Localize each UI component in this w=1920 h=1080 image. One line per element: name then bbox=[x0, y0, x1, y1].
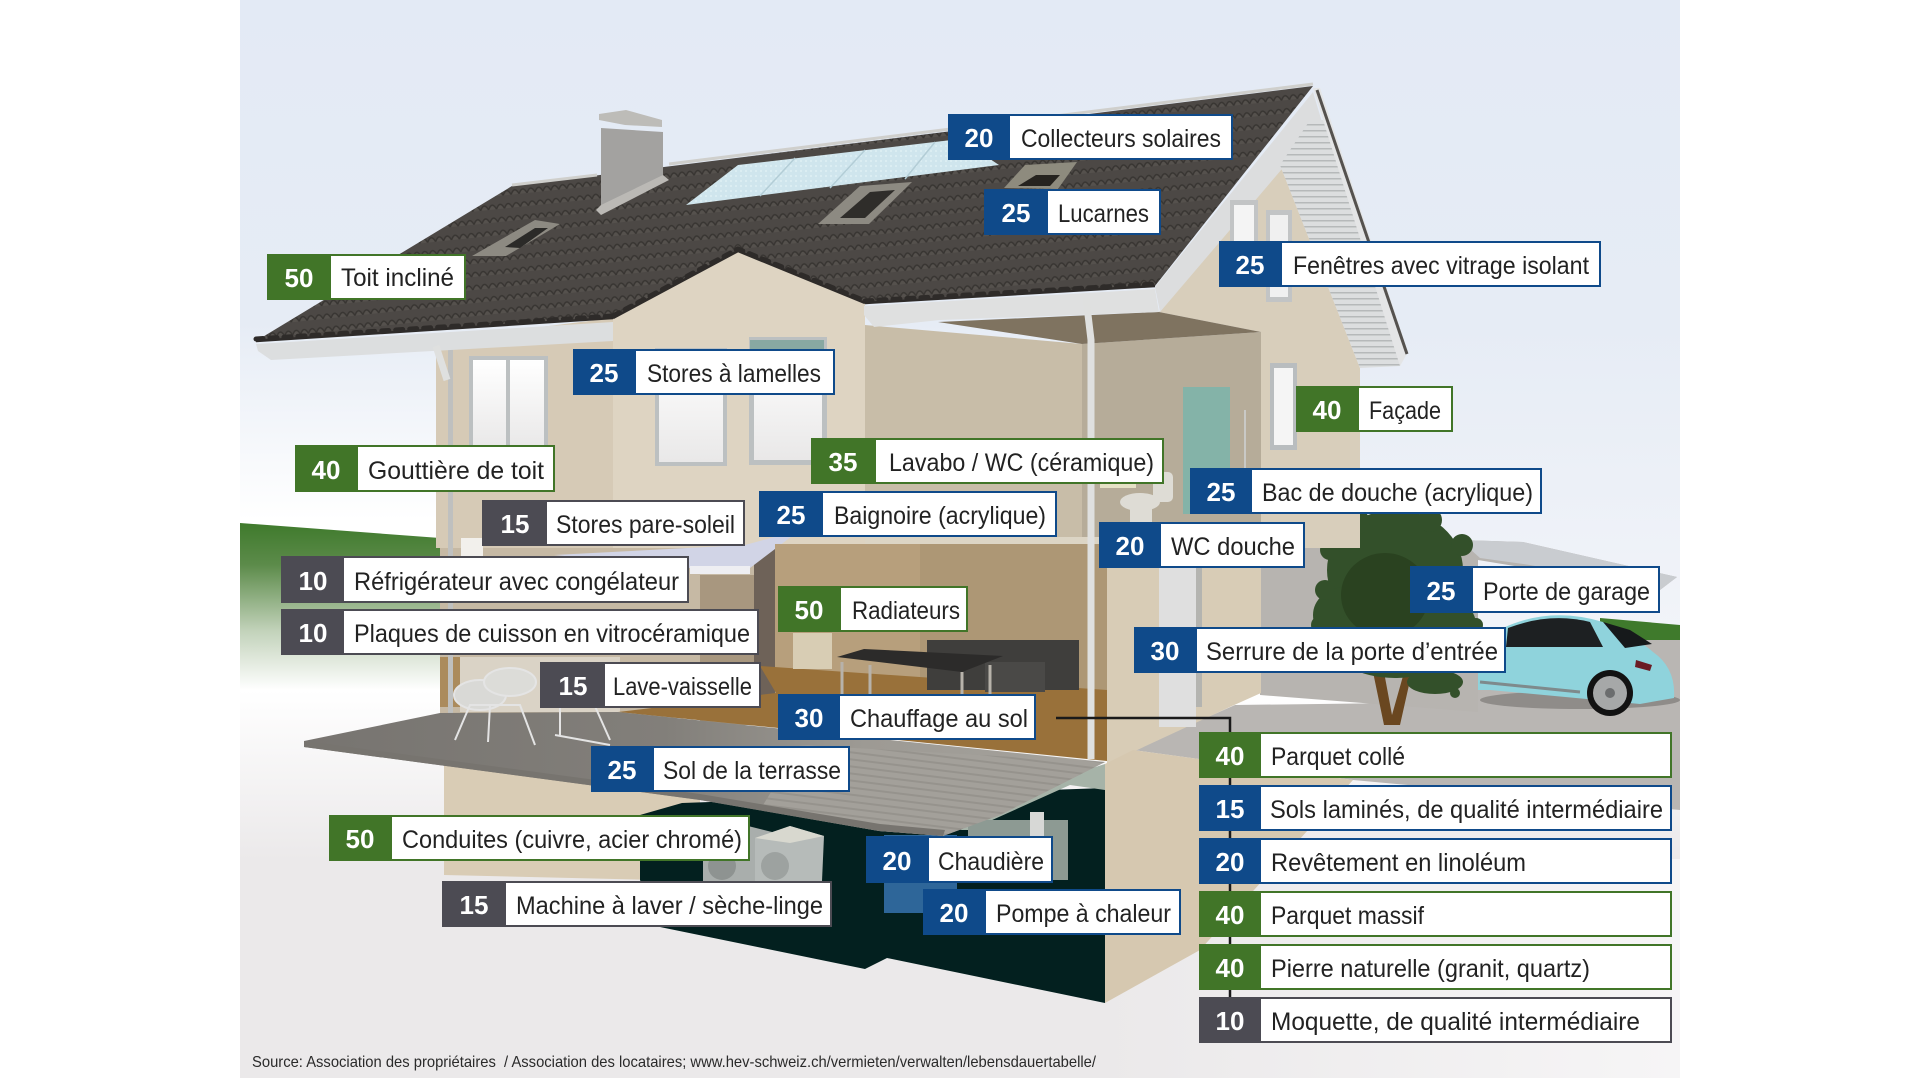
label: Lave-vaisselle bbox=[540, 662, 761, 708]
item: Sols laminés bbox=[1199, 785, 1672, 831]
label: Réfrigérateur avec congélateur bbox=[281, 556, 689, 603]
label: Serrure de la porte d'entrée: 30 bbox=[1151, 636, 1179, 666]
garage and driveway bbox=[1133, 540, 1680, 810]
item: Parquet massif bbox=[1199, 891, 1672, 937]
label: Plaques de cuisson en vitrocéramique bbox=[281, 609, 759, 655]
sofa bbox=[927, 640, 1079, 692]
item: Sols laminés: 15 bbox=[1216, 794, 1244, 824]
barge boards and soffit bbox=[1155, 92, 1322, 312]
label: Chauffage au sol: 30 bbox=[795, 703, 823, 733]
label: Conduites (cuivre, acier chromé): Conduites (cuivre, acier chromé) bbox=[402, 826, 742, 854]
label: Chaudière: 20 bbox=[883, 846, 911, 876]
label: Pompe à chaleur: 20 bbox=[940, 898, 968, 928]
label: Fenêtres avec vitrage isolant: Fenêtres avec vitrage isolant bbox=[1293, 252, 1589, 280]
label: WC douche: 20 bbox=[1116, 531, 1144, 561]
item: Parquet collé bbox=[1199, 732, 1672, 778]
item: Sols laminés: Sols laminés, de qualité intermédiaire bbox=[1270, 796, 1663, 824]
label: Fenêtres avec vitrage isolant: 25 bbox=[1236, 250, 1264, 280]
label: Gouttière de toit: Gouttière de toit bbox=[368, 457, 544, 485]
label: Serrure de la porte d'entrée bbox=[1134, 627, 1506, 673]
label: Machine à laver / sèche-linge: Machine à laver / sèche-linge bbox=[516, 892, 823, 920]
item: Parquet massif: Parquet massif bbox=[1271, 902, 1424, 930]
item: Parquet collé: 40 bbox=[1216, 741, 1244, 771]
base wall left bbox=[444, 765, 700, 881]
label: Lavabo / WC (céramique): Lavabo / WC (céramique) bbox=[889, 449, 1154, 477]
car bbox=[1478, 615, 1680, 716]
label: Lavabo / WC (céramique) bbox=[811, 438, 1164, 484]
label: Lavabo / WC (céramique): 35 bbox=[829, 447, 857, 477]
green hill left bbox=[240, 523, 440, 690]
awning bbox=[554, 530, 800, 574]
label: Chaudière: Chaudière bbox=[938, 848, 1044, 876]
label: Stores pare-soleil: Stores pare-soleil bbox=[556, 511, 735, 539]
label: Chauffage au sol: Chauffage au sol bbox=[850, 705, 1028, 733]
item: Revêtement en linoléum: Revêtement en linoléum bbox=[1271, 849, 1526, 877]
label: Baignoire (acrylique) bbox=[759, 491, 1057, 537]
label: Baignoire (acrylique): 25 bbox=[777, 500, 805, 530]
gutters bbox=[256, 322, 613, 360]
label: Façade: 40 bbox=[1313, 395, 1341, 425]
label: Stores à lamelles bbox=[573, 349, 835, 395]
item: Parquet massif: 40 bbox=[1216, 900, 1244, 930]
label: Collecteurs solaires bbox=[948, 114, 1233, 160]
chimney bbox=[596, 110, 669, 215]
label: Gouttière de toit bbox=[295, 445, 555, 492]
green hill right bbox=[1600, 618, 1680, 645]
label: Porte de garage: Porte de garage bbox=[1483, 578, 1650, 606]
label: Gouttière de toit: 40 bbox=[312, 455, 340, 485]
label: Bac de douche (acrylique) bbox=[1190, 468, 1542, 514]
label: Sol de la terrasse: Sol de la terrasse bbox=[663, 757, 841, 785]
label: Plaques de cuisson en vitrocéramique: Plaques de cuisson en vitrocéramique bbox=[354, 620, 750, 648]
label: Porte de garage: 25 bbox=[1427, 576, 1455, 606]
label: Fenêtres avec vitrage isolant bbox=[1219, 241, 1601, 287]
label: Bac de douche (acrylique): Bac de douche (acrylique) bbox=[1262, 479, 1533, 507]
label: WC douche bbox=[1099, 522, 1305, 568]
kitchen and awning bbox=[440, 340, 800, 725]
label: Collecteurs solaires: Collecteurs solaires bbox=[1021, 125, 1221, 153]
item: Revêtement en linoléum: 20 bbox=[1216, 847, 1244, 877]
skylights bbox=[472, 162, 1077, 256]
coffee table bbox=[837, 649, 1003, 700]
background: sky and ground bbox=[240, 0, 1680, 1078]
toilet and washbasin bbox=[1120, 472, 1173, 529]
item: Parquet collé: Parquet collé bbox=[1271, 743, 1405, 771]
item: Moquette: 10 bbox=[1216, 1006, 1244, 1036]
garden furniture bbox=[454, 668, 626, 745]
label: Baignoire (acrylique): Baignoire (acrylique) bbox=[834, 502, 1046, 530]
label: Lucarnes: 25 bbox=[1002, 198, 1030, 228]
label: Bac de douche (acrylique): 25 bbox=[1207, 477, 1235, 507]
terrace slab bbox=[304, 712, 1105, 836]
label: Lucarnes bbox=[984, 189, 1161, 235]
label: Machine à laver / sèche-linge: 15 bbox=[460, 890, 488, 920]
living room bbox=[618, 544, 1107, 761]
label: Collecteurs solaires: 20 bbox=[965, 123, 993, 153]
label: WC douche: WC douche bbox=[1171, 533, 1295, 561]
basement bbox=[640, 764, 1105, 1003]
bathroom cutaway bbox=[865, 312, 1261, 546]
connector: floor heating to flooring list bbox=[1056, 718, 1230, 1000]
label: Façade bbox=[1296, 386, 1453, 432]
label: Sol de la terrasse: 25 bbox=[608, 755, 636, 785]
item: Pierre naturelle bbox=[1199, 944, 1672, 990]
blue tank bbox=[884, 835, 957, 913]
solar collectors bbox=[686, 139, 999, 205]
right wall door bbox=[1159, 567, 1202, 727]
label: Chauffage au sol bbox=[778, 694, 1036, 740]
source note: Source: Association des propriétaires / Association des locataires; www.hev-schweiz.ch/vermieten/verwalten/lebensdauertabelle/ bbox=[252, 1054, 1097, 1071]
label: Pompe à chaleur: Pompe à chaleur bbox=[996, 900, 1171, 928]
label: Toit incliné bbox=[267, 254, 466, 300]
label: Lave-vaisselle: 15 bbox=[559, 671, 587, 701]
item: Moquette: Moquette, de qualité intermédiaire bbox=[1271, 1008, 1640, 1036]
roof bbox=[256, 84, 1408, 368]
label: Lave-vaisselle: Lave-vaisselle bbox=[613, 673, 752, 701]
house: upper walls bbox=[436, 165, 1360, 764]
label: Conduites (cuivre, acier chromé) bbox=[329, 815, 750, 861]
label: Pompe à chaleur bbox=[923, 889, 1181, 935]
label: Plaques de cuisson en vitrocéramique: 10 bbox=[299, 618, 327, 648]
label: Réfrigérateur avec congélateur: 10 bbox=[299, 566, 327, 596]
label: Porte de garage bbox=[1410, 566, 1660, 613]
washing machines bbox=[703, 826, 824, 881]
label: Toit incliné: Toit incliné bbox=[341, 264, 454, 292]
item: Moquette bbox=[1199, 997, 1672, 1043]
label: Lucarnes: Lucarnes bbox=[1058, 200, 1149, 228]
radiator bbox=[793, 633, 832, 669]
label: Radiateurs: Radiateurs bbox=[852, 597, 960, 625]
label: Radiateurs bbox=[778, 586, 968, 632]
label: Radiateurs: 50 bbox=[795, 595, 823, 625]
flooring list bbox=[1199, 732, 1672, 1043]
label: Stores à lamelles: 25 bbox=[590, 358, 618, 388]
label: Réfrigérateur avec congélateur: Réfrigérateur avec congélateur bbox=[354, 568, 679, 596]
label: Stores pare-soleil: 15 bbox=[501, 509, 529, 539]
label: Stores à lamelles: Stores à lamelles bbox=[647, 360, 821, 388]
label: Machine à laver / sèche-linge bbox=[442, 881, 832, 927]
downpipes bbox=[436, 298, 1091, 759]
item: Revêtement en linoléum bbox=[1199, 838, 1672, 884]
label: Conduites (cuivre, acier chromé): 50 bbox=[346, 824, 374, 854]
tree bbox=[1311, 508, 1483, 725]
label: Serrure de la porte d'entrée: Serrure de la porte d’entrée bbox=[1206, 638, 1498, 666]
label: Chaudière bbox=[866, 836, 1053, 883]
label: Sol de la terrasse bbox=[591, 746, 850, 792]
label: Stores pare-soleil bbox=[482, 500, 745, 546]
base wall right bbox=[1105, 750, 1353, 1003]
item: Pierre naturelle: Pierre naturelle (granit, quartz) bbox=[1271, 955, 1590, 983]
item: Pierre naturelle: 40 bbox=[1216, 953, 1244, 983]
label: Façade: Façade bbox=[1369, 397, 1441, 425]
windows bbox=[469, 200, 1297, 466]
label: Toit incliné: 50 bbox=[285, 263, 313, 293]
